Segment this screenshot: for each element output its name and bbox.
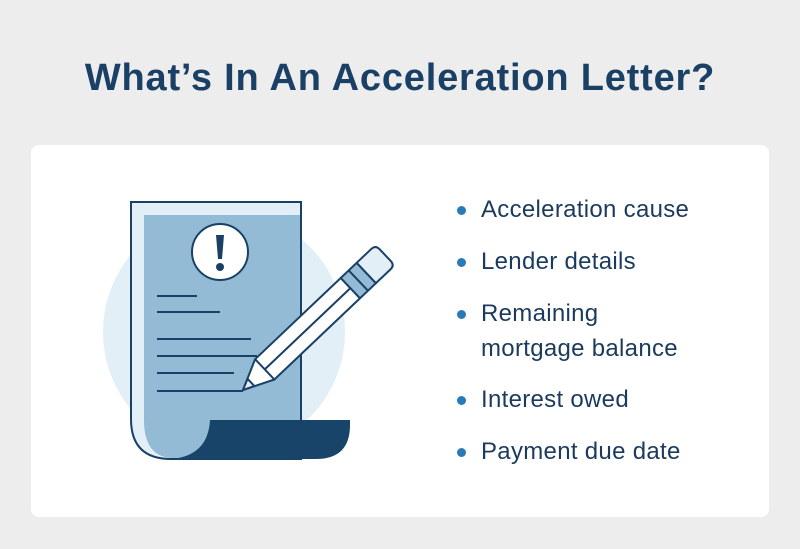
bullet: acceleration cause: Acceleration cause [481, 196, 689, 223]
bullet: remaining balance: mortgage balance [481, 335, 678, 362]
dark fold [171, 420, 350, 459]
title: What’s In An Acceleration Letter? [85, 57, 715, 99]
bullet: lender details: Lender details [481, 248, 636, 275]
icon: pencil [233, 245, 395, 400]
bullet: interest owed: Interest owed [481, 386, 629, 413]
bullet list [457, 196, 689, 465]
bullet: payment due date: Payment due date [481, 438, 681, 465]
bullet: remaining balance [457, 300, 678, 362]
bullet: remaining balance: Remaining [481, 300, 598, 327]
panel: card [31, 145, 769, 517]
icon: exclamation [192, 224, 248, 280]
